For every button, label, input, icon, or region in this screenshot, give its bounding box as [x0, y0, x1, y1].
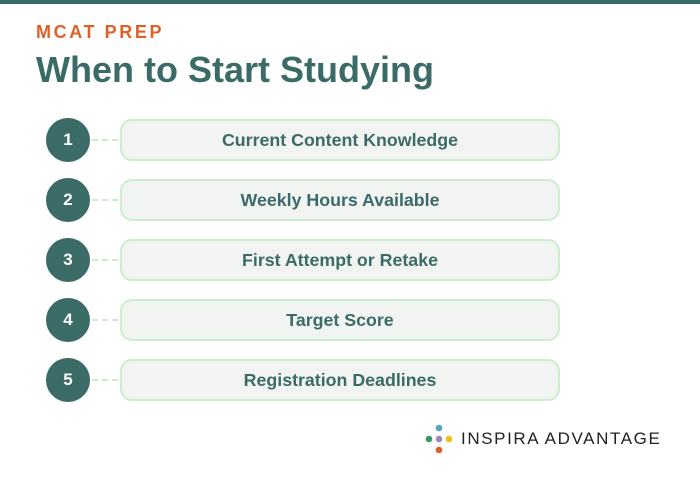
step 1: [46, 118, 560, 162]
step 3: First Attempt or Retake: [242, 250, 438, 270]
step 4: [46, 298, 560, 342]
step 2: 2: [63, 190, 73, 209]
step 2: Weekly Hours Available: [240, 190, 439, 210]
step 5: 5: [63, 370, 73, 389]
step 5: [46, 358, 560, 402]
logo: [426, 424, 661, 454]
step 5: Registration Deadlines: [244, 370, 436, 390]
step 1: Current Content Knowledge: [222, 130, 458, 150]
title: When to Start Studying: [36, 49, 434, 90]
step 1: 1: [63, 130, 73, 149]
kicker: MCAT PREP: MCAT PREP: [36, 22, 164, 42]
step 2: [46, 178, 560, 222]
step 4: Target Score: [286, 310, 394, 330]
step 3: 3: [63, 250, 73, 269]
logo text: INSPIRA ADVANTAGE: [461, 429, 661, 448]
step 4: 4: [63, 310, 73, 329]
step 3: [46, 238, 560, 282]
icon: logo dots: [426, 424, 452, 454]
